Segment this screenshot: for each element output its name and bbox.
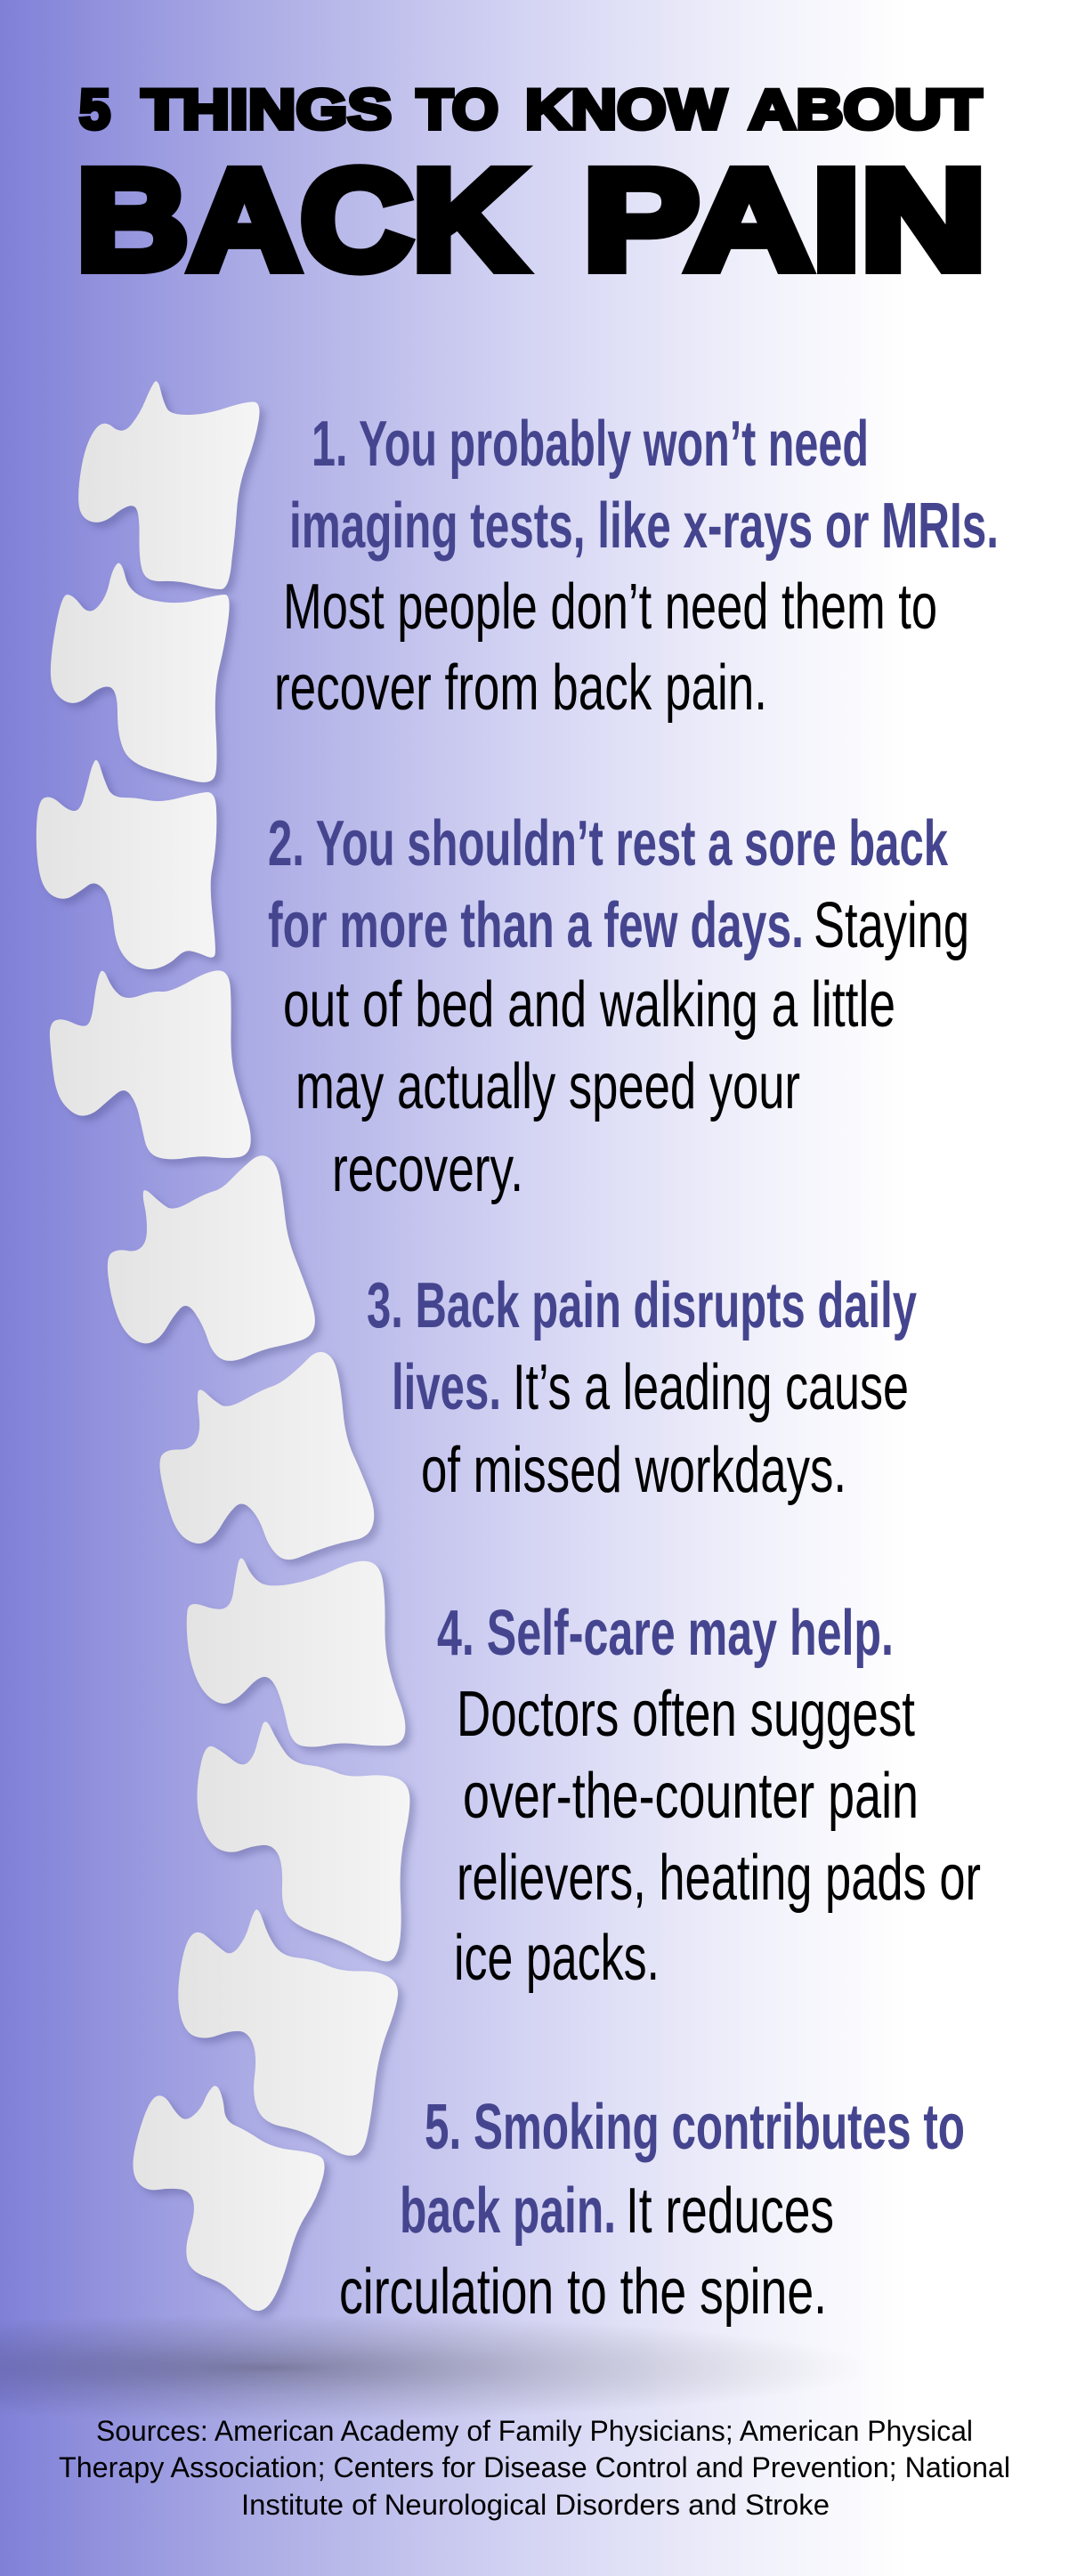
text block: tip 3 [367,1270,917,1506]
title line: 5 things to know about: 5 [79,78,110,141]
vertebra 5 [108,1155,315,1361]
title [77,78,986,299]
vertebra 6 [159,1352,374,1559]
text block: tip 5 [339,2092,965,2328]
text block: tip 2: may actually speed your [296,1051,800,1122]
vertebra 9 [178,1909,398,2156]
vertebra 8 [197,1721,409,1962]
text block: tip 2: for more than a few days. [268,890,804,961]
title line: back pain [77,140,986,299]
title line: 5 things to know about: THINGS [142,78,392,141]
sources: Institute of Neurological Disorders and Stroke [241,2489,830,2521]
text block: tip 4: over-the-counter pain [463,1761,919,1832]
illustration: spine [36,381,409,2311]
sources: Therapy Association; Centers for Disease Control and Prevention; National [59,2451,1010,2483]
sources [59,2415,1010,2521]
sources: Sources: American Academy of Family Physicians; American Physical [96,2415,973,2447]
title line: 5 things to know about: ABOUT [749,78,982,141]
text block: tip 2 [268,808,969,1205]
text block: tip 2: Staying [814,890,969,961]
text block: tip 4 [437,1598,981,1994]
text block: tip 1: recover from back pain. [274,652,767,724]
text block: tip 2: recovery. [332,1134,523,1205]
vertebra 2 [51,563,230,782]
title line: back pain: BACK [77,140,524,299]
vertebra 4 [50,970,251,1159]
text block: tip 4: ice packs. [454,1923,660,1994]
vertebra 10 [133,2086,325,2311]
text block: tip 3: It’s a leading cause [513,1352,909,1423]
ground shadow [0,2314,872,2421]
title line: 5 things to know about [79,78,982,141]
text block: tip 5: circulation to the spine. [339,2256,827,2328]
text block: tip 4: Doctors often suggest [457,1679,915,1750]
title line: 5 things to know about: TO [417,78,498,141]
text block: tip 1 [274,409,999,724]
text block: tip 5: back pain. [400,2175,616,2247]
text block: tip 3: of missed workdays. [421,1435,846,1506]
text block: tip 3: lives. [392,1352,501,1423]
title line: back pain: PAIN [583,140,986,299]
vertebra 3 [36,760,216,969]
title line: 5 things to know about: KNOW [525,78,727,141]
vertebra 7 [187,1559,405,1747]
vertebra 1 [78,381,259,589]
text block: tip 5: It reduces [626,2175,834,2247]
